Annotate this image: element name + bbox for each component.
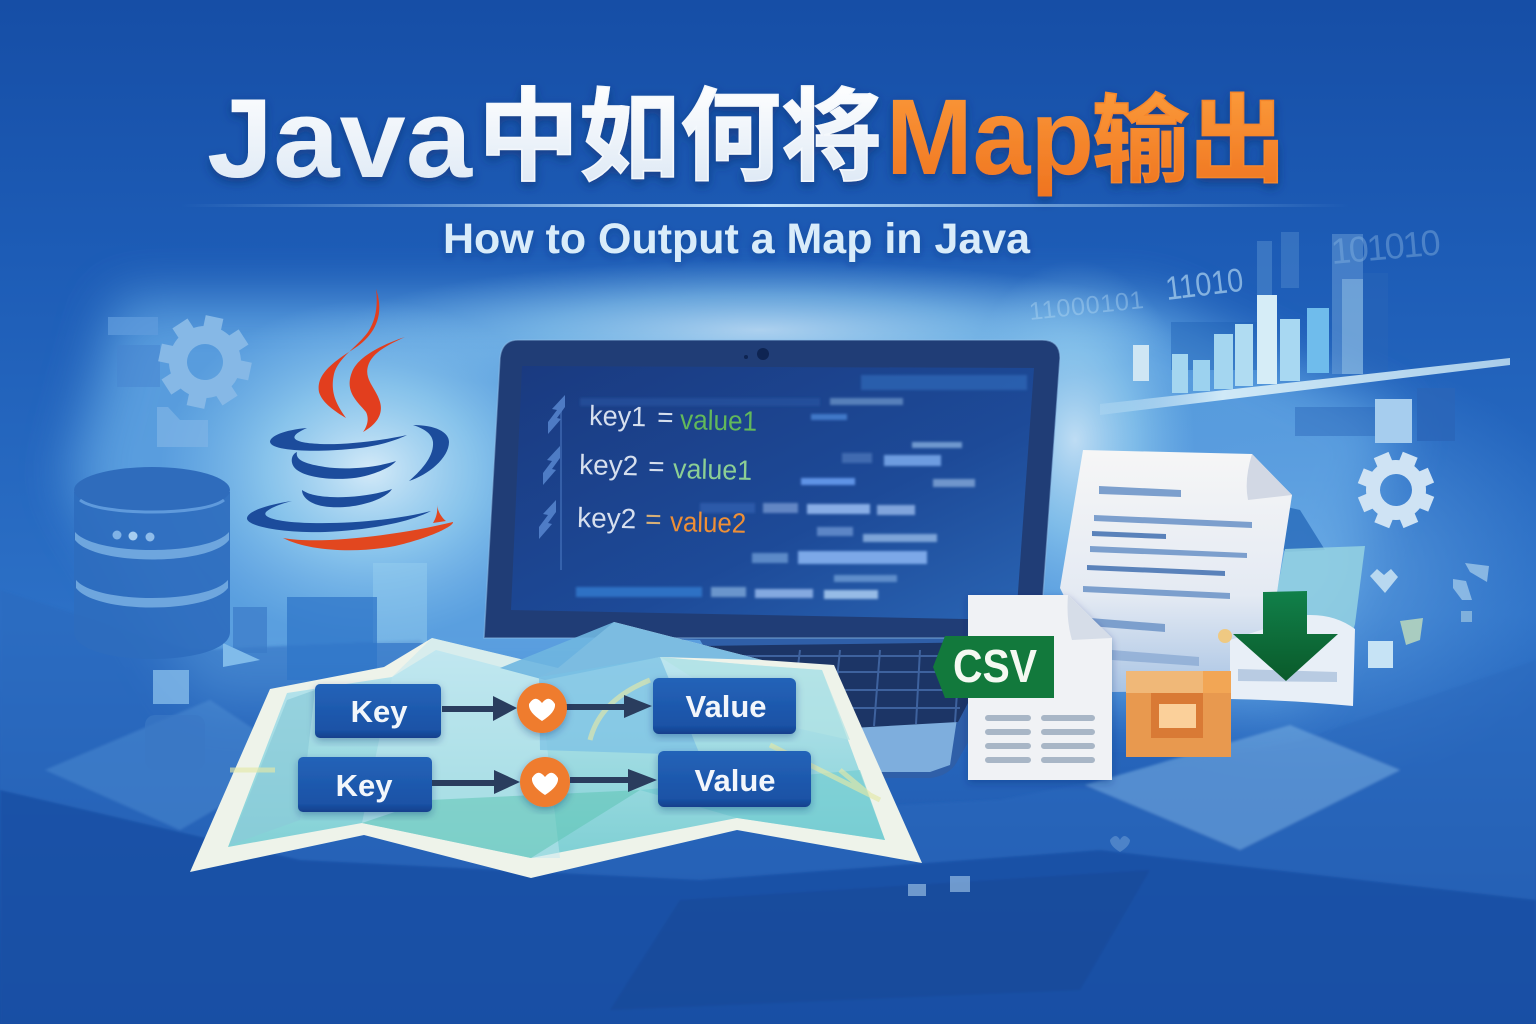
code text [577,400,758,539]
background chart: right: 101010 [1329,222,1442,272]
bars [1133,295,1329,393]
icon: download envelope [1218,591,1355,706]
row 1 [315,678,796,738]
document: CSV file: CSV [953,640,1037,692]
map sheet [190,622,922,878]
code text: = [657,402,674,433]
laptop base [484,634,1030,778]
icon: heart node 1 [517,683,567,733]
code text: value1 [680,404,757,437]
icon: heart node 2 [520,757,570,807]
decorative left blocks [108,317,427,770]
cup rings [247,425,449,532]
title: Map [886,76,1094,197]
value box 1 [653,678,796,734]
icon: java logo [247,289,453,550]
laptop screen [511,366,1034,620]
code text: value1 [673,453,752,486]
key box 2 [298,757,432,812]
decorative right blocks [1295,388,1489,668]
arrow 1 [442,695,652,721]
key box 1 [315,684,441,738]
code text: key1 [589,400,647,432]
title: Java [207,76,473,201]
row 2 [298,751,811,812]
code text: key2 [577,502,637,534]
icon: box [1126,671,1231,757]
document: text file [1060,450,1365,692]
icon: gear left [150,307,260,417]
map folds and roads [230,622,885,858]
camera [744,348,769,360]
code text: = [645,504,662,535]
small floating squares [908,836,1130,896]
title rule [180,204,1350,207]
ghost bars [1171,232,1388,374]
map panel [190,622,922,878]
icon: gear right [1347,441,1445,539]
CSV label [933,636,1054,698]
key box 2: Key [336,768,393,803]
laptop [484,340,1060,778]
value box 2: Value [694,763,776,798]
title: 中如何将 [478,82,882,194]
blurred code lines [576,375,1027,599]
value box 2 [658,751,811,807]
title: 输出 [1092,88,1286,195]
icon: database [74,467,230,659]
title [207,76,1286,201]
background chart: right: 11010 [1163,261,1245,307]
steam [319,289,405,432]
code text: value2 [670,506,746,539]
background chart: right [1028,222,1510,415]
document: CSV file [933,595,1112,780]
code text: key2 [579,449,639,481]
arrow 2 [432,769,657,794]
key box 1: Key [351,694,408,729]
binary text: 11000101 [1028,286,1145,326]
code text: = [648,451,665,482]
keyboard [700,642,1000,732]
laptop bezel [484,340,1060,638]
code gutter [539,395,565,570]
subtitle: How to Output a Map in Java [443,215,1031,263]
value box 1: Value [686,689,766,724]
